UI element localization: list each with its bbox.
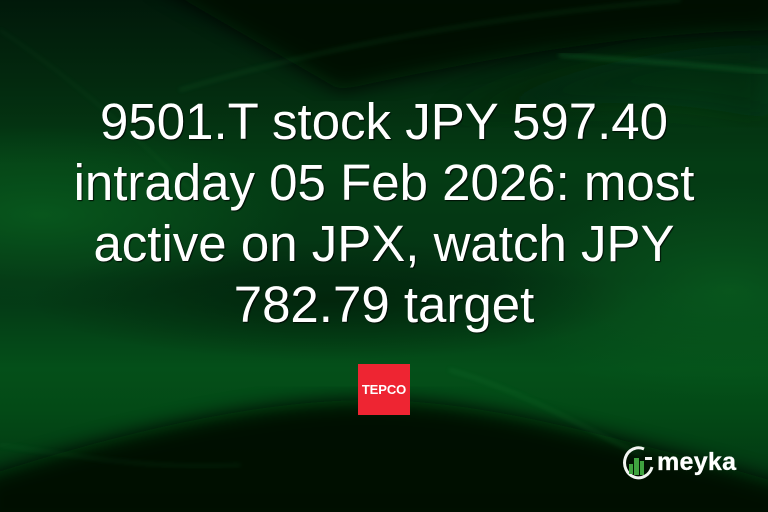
logo: TEPCO (358, 364, 410, 415)
title: active on JPX, watch JPY (93, 215, 675, 272)
icon: meyka ring with bars (623, 446, 654, 480)
logo: TEPCO: TEPCO (362, 382, 406, 397)
bottom dark swoosh (0, 400, 768, 512)
logo: meyka (623, 446, 736, 480)
title (74, 93, 696, 334)
top dark swoosh (150, 0, 768, 90)
logo: meyka: meyka (657, 448, 736, 476)
title: intraday 05 Feb 2026: most (74, 154, 694, 211)
title: 782.79 target (234, 276, 534, 333)
title: 9501.T stock JPY 597.40 (100, 93, 668, 150)
